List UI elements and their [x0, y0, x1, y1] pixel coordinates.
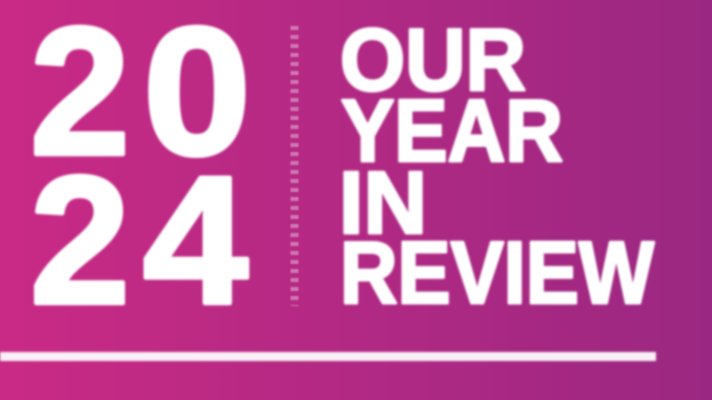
- title: our year in review: OUR: [340, 10, 526, 109]
- title: our year in review: [339, 10, 654, 322]
- year heading: 2024: 4: [143, 138, 248, 342]
- dotted vertical divider: [290, 26, 298, 306]
- title: our year in review: REVIEW: [340, 223, 654, 322]
- year heading: 2024: 2: [30, 138, 130, 342]
- year heading: 2024: [30, 0, 251, 342]
- horizontal rule: [0, 352, 656, 361]
- title: our year in review: IN: [339, 153, 427, 252]
- title: our year in review: YEAR: [341, 81, 563, 180]
